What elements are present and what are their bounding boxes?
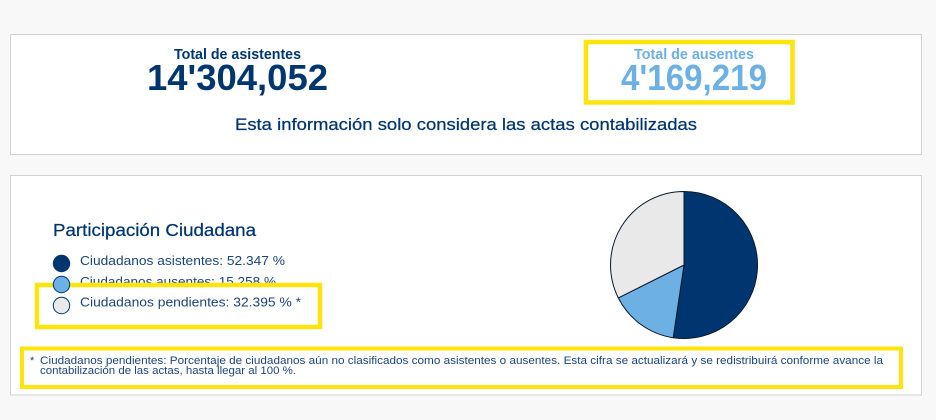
total de asistentes: Total de asistentes xyxy=(174,47,301,63)
highlight: total de ausentes: 4'169,219 xyxy=(621,57,767,98)
total de asistentes: 14'304,052 xyxy=(147,57,328,98)
highlight: footnote xyxy=(22,348,901,387)
panel: participación ciudadana xyxy=(10,176,922,395)
legend text: asistentes: Ciudadanos asistentes: 52.347 % xyxy=(80,253,285,268)
highlight: footnote: * xyxy=(30,355,35,367)
highlight: total de ausentes xyxy=(586,42,792,102)
note: actas contabilizadas: Esta información solo considera las actas contabilizadas xyxy=(235,115,697,134)
highlight: footnote: contabilización de las actas, hasta llegar al 100 %. xyxy=(40,365,296,377)
slice: ausentes xyxy=(618,265,684,338)
swatch: asistentes xyxy=(53,255,70,272)
legend text: ausentes: Ciudadanos ausentes: 15.258 % xyxy=(80,274,276,289)
legend text: pendientes: Ciudadanos pendientes: 32.395 % * xyxy=(80,294,301,310)
slice: pendientes xyxy=(611,192,684,298)
highlight: pendientes xyxy=(37,285,320,327)
swatch: ausentes xyxy=(53,276,70,293)
highlight: total de ausentes: Total de ausentes xyxy=(634,47,754,63)
panel: totals xyxy=(10,34,922,154)
swatch: pendientes xyxy=(53,297,70,314)
pie chart xyxy=(611,192,758,338)
highlight: footnote: Ciudadanos pendientes: Porcentaje de ciudadanos aún no clasificados como asistentes o ausentes. Esta cifra se actualizará y se redistribuirá conforme avance la xyxy=(40,355,884,367)
heading: Participación Ciudadana xyxy=(53,220,256,240)
legend xyxy=(37,253,320,327)
slice: asistentes xyxy=(673,192,758,338)
